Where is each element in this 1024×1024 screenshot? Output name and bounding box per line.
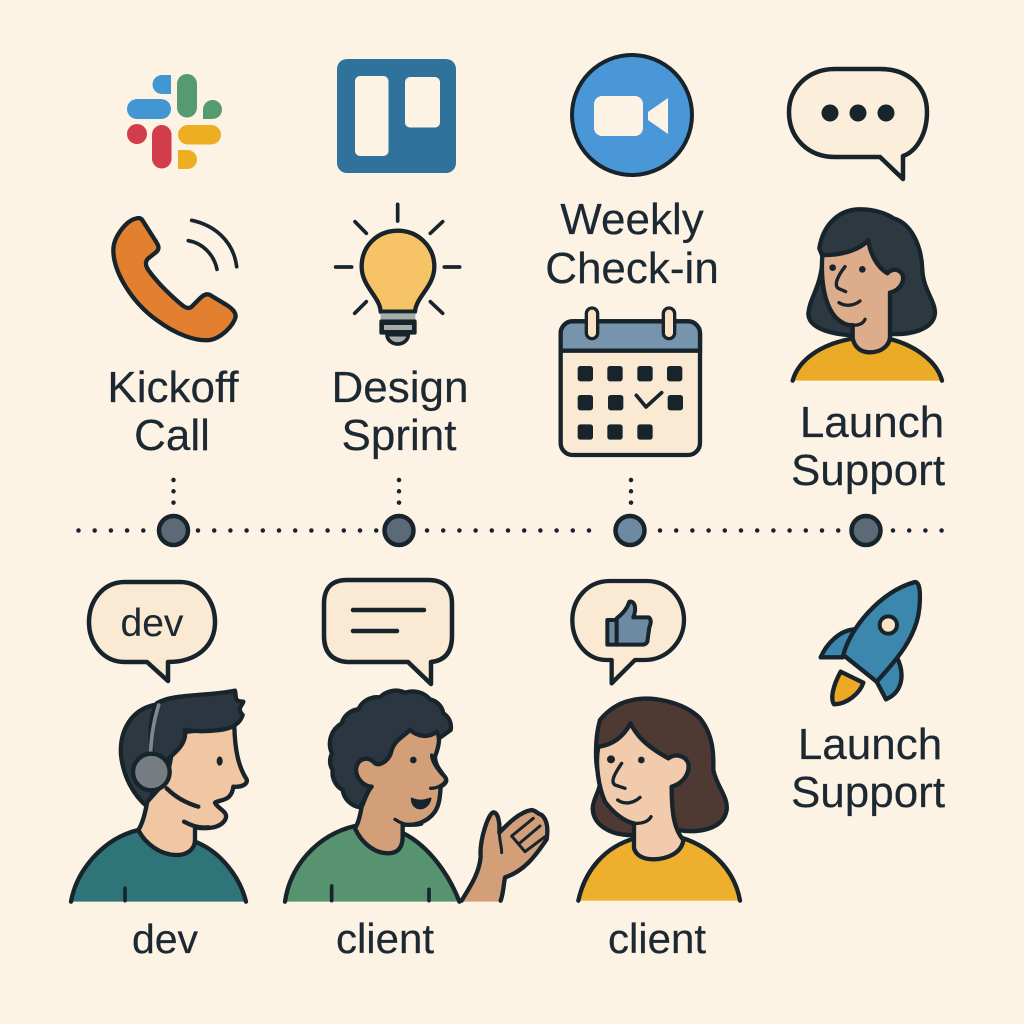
- label: client right: client: [608, 915, 706, 962]
- icon: phone handset: [113, 218, 237, 340]
- label: Design Sprint: Design: [332, 363, 468, 412]
- heading: Weekly Check-in: Weekly: [560, 195, 704, 244]
- label: Launch Support lower: [791, 720, 945, 817]
- label: Launch Support lower: Support: [791, 768, 945, 817]
- icon: calendar: [561, 308, 700, 455]
- milestone 2: [384, 516, 414, 545]
- icon: trello board: [337, 59, 456, 173]
- person: client woman brown hair: [578, 699, 740, 901]
- label: dev: dev: [132, 916, 199, 962]
- person: woman launch support: [793, 209, 942, 381]
- timeline: [78, 480, 950, 545]
- speech bubble: thumbs up: [572, 581, 684, 683]
- label: Kickoff Call: [107, 363, 239, 460]
- heading: Weekly Check-in: Check-in: [545, 244, 719, 293]
- person: client with curly hair: [285, 691, 547, 902]
- icon: chat bubble with dots: [789, 69, 927, 179]
- label: Launch Support upper: Launch: [800, 398, 944, 447]
- label: Kickoff Call: Call: [134, 411, 210, 460]
- label: Launch Support upper: [791, 398, 945, 495]
- speech bubble: dev: dev: [121, 602, 184, 645]
- milestone 3: [616, 516, 644, 545]
- milestone 4: [852, 516, 880, 545]
- speech bubble: dev: [89, 582, 215, 681]
- heading: Weekly Check-in: [545, 195, 719, 293]
- label: Design Sprint: [332, 363, 468, 460]
- icon: rocket: [821, 582, 920, 704]
- icon: video camera circle: [572, 55, 692, 175]
- label: client left: client: [336, 915, 434, 962]
- speech bubble: message lines: [324, 580, 452, 684]
- milestone 1: [159, 516, 188, 545]
- label: Design Sprint: Sprint: [342, 411, 456, 460]
- label: Launch Support lower: Launch: [798, 720, 942, 769]
- person: dev with headset: [71, 691, 247, 902]
- label: Launch Support upper: Support: [791, 446, 945, 495]
- label: Kickoff Call: Kickoff: [107, 363, 239, 412]
- icon: light bulb: [336, 204, 460, 344]
- icon: slack logo: [127, 74, 222, 169]
